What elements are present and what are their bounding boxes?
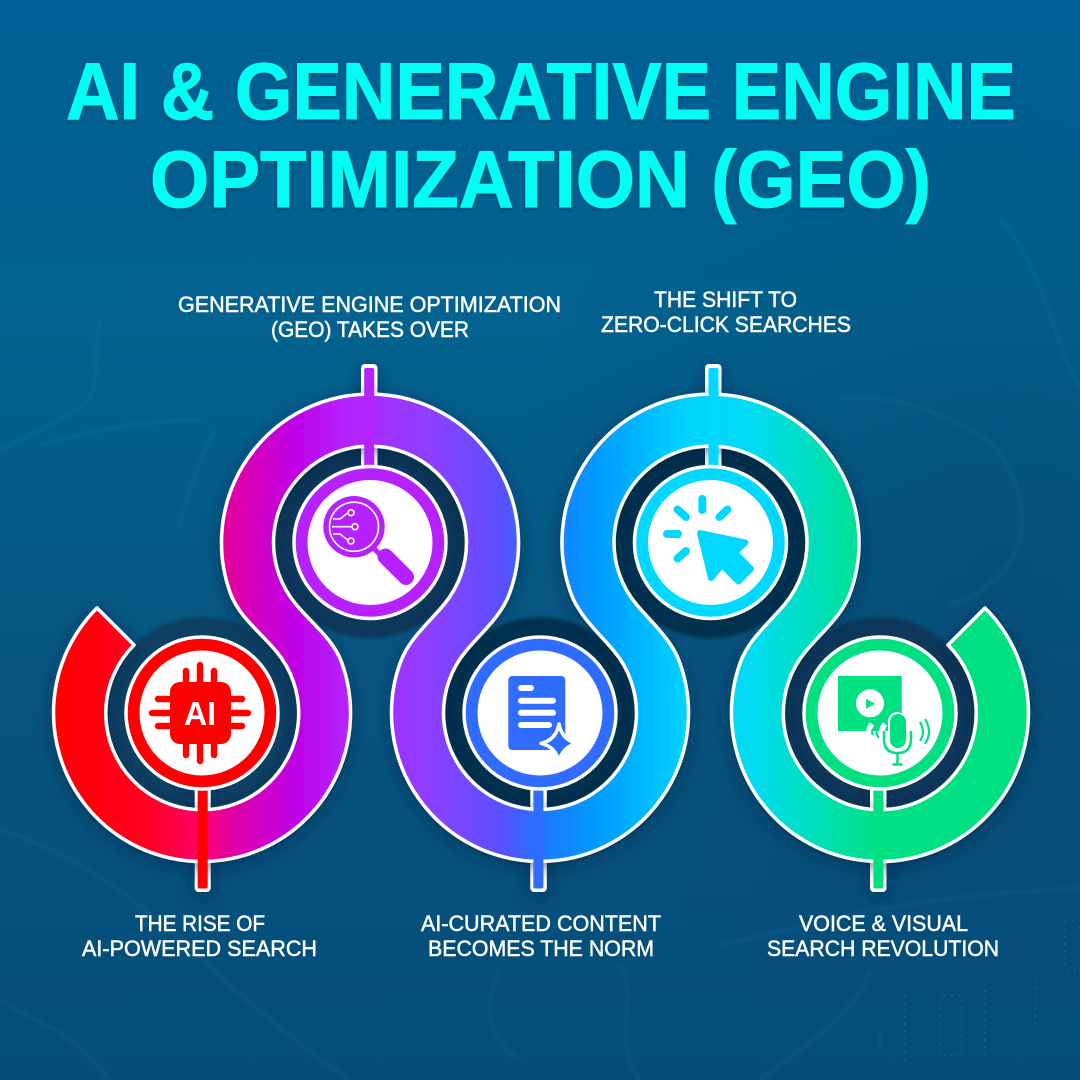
title: OPTIMIZATION (GEO) xyxy=(150,135,931,225)
label: rise of ai-powered search: THE RISE OF xyxy=(135,911,265,936)
label: voice and visual search: SEARCH REVOLUTION xyxy=(767,936,999,961)
icon: ai chip: AI xyxy=(184,695,216,732)
label: zero-click searches: THE SHIFT TO xyxy=(654,287,797,312)
winding gradient band xyxy=(54,394,1028,861)
dark ring shading xyxy=(106,446,976,809)
step 5: voice and visual search xyxy=(804,637,956,888)
label: ai-curated content xyxy=(421,911,661,961)
label: voice and visual search: VOICE & VISUAL xyxy=(799,911,968,936)
title xyxy=(66,47,1016,225)
step 4: zero-click searches xyxy=(634,368,786,618)
label: zero-click searches xyxy=(601,287,851,337)
step 2: generative engine optimization xyxy=(294,368,446,618)
step 3: ai-curated content xyxy=(464,637,616,888)
icon: magnifier with circuit xyxy=(323,496,406,577)
label: ai-curated content: AI-CURATED CONTENT xyxy=(421,911,661,936)
label: voice and visual search xyxy=(767,911,999,961)
label: ai-curated content: BECOMES THE NORM xyxy=(428,936,654,961)
label: rise of ai-powered search xyxy=(82,911,317,961)
icon: click cursor xyxy=(667,499,751,582)
icon: ai chip xyxy=(152,665,248,761)
label: generative engine optimization: GENERATIVE ENGINE OPTIMIZATION xyxy=(178,292,561,317)
label: rise of ai-powered search: AI-POWERED SEARCH xyxy=(82,936,317,961)
step 1: ai-powered search xyxy=(126,637,278,888)
icon: document with sparkle xyxy=(508,676,577,762)
title: AI & GENERATIVE ENGINE xyxy=(66,47,1016,137)
stem outlines xyxy=(195,364,886,892)
icon: video and microphone xyxy=(838,676,929,764)
label: zero-click searches: ZERO-CLICK SEARCHES xyxy=(601,312,851,337)
label: generative engine optimization xyxy=(178,292,561,342)
label: generative engine optimization: (GEO) TAKES OVER xyxy=(271,317,469,342)
